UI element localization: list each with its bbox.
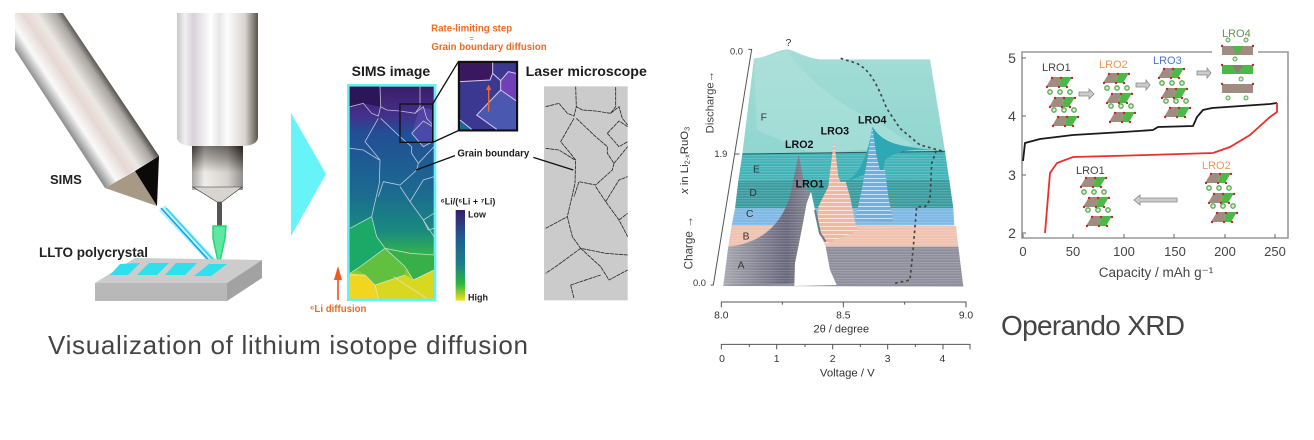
axis ticks and labels: 50 xyxy=(1066,244,1080,259)
axis: voltage xyxy=(719,344,970,380)
peak and region labels: C xyxy=(746,209,754,220)
axis ticks and labels: 200 xyxy=(1214,244,1236,259)
axis ticks and labels: 5 xyxy=(1008,50,1016,66)
axis: composition: x in Li xyxy=(679,164,691,194)
heading: SIMS image: SIMS image xyxy=(352,63,430,79)
structure: LRO3 charge: LRO3 xyxy=(1153,55,1182,67)
arrow: 6Li diffusion xyxy=(310,266,367,315)
legend: colour bar xyxy=(441,196,495,303)
axis: 2-theta: 8.0 xyxy=(714,311,729,322)
label: LLTO polycrystal: LLTO polycrystal xyxy=(39,245,148,260)
structure: LRO1 charge xyxy=(1042,62,1079,127)
axis: composition: 3 xyxy=(683,127,692,131)
legend: colour bar: High xyxy=(468,293,488,303)
axis: composition: 0.0 xyxy=(693,278,706,288)
axis ticks and labels xyxy=(1008,50,1286,280)
laser microscope image xyxy=(544,86,628,300)
axis: voltage: 4 xyxy=(939,354,945,365)
voltage profile dotted curve xyxy=(841,58,943,283)
label: SIMS: SIMS xyxy=(50,172,82,187)
structure: LRO2 discharge xyxy=(1202,160,1238,223)
chart: operando XRD waterfall xyxy=(679,38,973,380)
axis: 2-theta: 2θ / degree xyxy=(814,324,869,336)
peak and region labels: B xyxy=(743,231,750,242)
peak and region labels: LRO1 xyxy=(796,178,824,190)
legend: colour bar: Low xyxy=(468,209,486,219)
legend: colour bar: ⁶Li/(⁶Li + ⁷Li) xyxy=(441,196,495,206)
axis ticks and labels: 3 xyxy=(1008,167,1016,183)
peak and region labels: LRO3 xyxy=(821,125,849,137)
structure: LRO3 charge xyxy=(1153,55,1191,118)
peak and region labels xyxy=(738,38,886,271)
axis: voltage: 0 xyxy=(719,354,725,365)
axis: composition: 0.0 xyxy=(730,46,743,56)
axis ticks and labels: 0 xyxy=(1019,244,1027,259)
peak and region labels: ? xyxy=(786,38,792,49)
axis ticks and labels: 250 xyxy=(1264,244,1286,259)
axis: 2-theta: 8.5 xyxy=(836,311,851,322)
heading: rate-limiting step xyxy=(431,23,547,53)
structure: LRO4: LRO4 xyxy=(1222,28,1251,40)
axis: 2-theta: 9.0 xyxy=(959,311,973,322)
axis: composition: Charge → xyxy=(683,216,696,269)
axis: voltage: 1 xyxy=(774,354,780,365)
peak and region labels: LRO2 xyxy=(785,139,813,151)
structure: LRO1 charge: LRO1 xyxy=(1042,62,1071,74)
peak and region labels: A xyxy=(738,260,745,271)
axis ticks and labels: 4 xyxy=(1008,108,1016,124)
peak and region labels: LRO4 xyxy=(858,114,886,126)
icon: angled SIMS ion gun xyxy=(15,13,159,206)
structure: LRO4 xyxy=(1221,28,1254,100)
waterfall bands xyxy=(723,49,963,287)
structure: LRO1 discharge xyxy=(1076,165,1113,227)
axis: composition: 1.9 xyxy=(714,149,727,159)
caption: Operando XRD: Operando XRD xyxy=(1001,310,1185,341)
heading: rate-limiting step: = xyxy=(470,37,474,43)
caption: visualization: Visualization of lithium isotope diffusion xyxy=(48,330,528,360)
peak: LRO3 xyxy=(817,140,858,243)
discharge curve xyxy=(1045,103,1277,233)
axis ticks and labels: Capacity / mAh g⁻¹ xyxy=(1099,265,1214,280)
axis: 2-theta xyxy=(714,302,973,336)
charge curve xyxy=(1023,103,1277,161)
callout: grain boundary: Grain boundary xyxy=(457,148,530,159)
axis: voltage: 2 xyxy=(830,354,836,365)
axis: voltage: 3 xyxy=(885,354,891,365)
axis: composition: 2-x xyxy=(683,154,692,164)
arrow: cyan triangle xyxy=(291,113,326,236)
structure: LRO1 discharge: LRO1 xyxy=(1076,165,1105,177)
peak: LRO1 xyxy=(794,192,837,286)
axis ticks and labels: 2 xyxy=(1008,225,1016,241)
structure: LRO2 charge: LRO2 xyxy=(1099,59,1128,71)
arrows between structures xyxy=(1079,68,1211,205)
icon: LLTO sample slab xyxy=(95,258,262,301)
peak: LRO2 xyxy=(723,155,813,286)
axis ticks and labels: 100 xyxy=(1113,244,1135,259)
peak and region labels: D xyxy=(749,188,757,199)
axis: composition xyxy=(679,46,752,288)
SIMS map with grain boundaries xyxy=(348,85,435,300)
chart: capacity voltage curves xyxy=(1008,28,1288,280)
structure: LRO2 discharge: LRO2 xyxy=(1202,160,1231,172)
panel: SIMS and laser microscope images xyxy=(310,23,647,315)
heading: rate-limiting step: Rate-limiting step xyxy=(431,23,512,34)
icon: vertical probe column xyxy=(177,13,258,228)
magnified inset xyxy=(433,62,517,142)
axis: voltage: Voltage / V xyxy=(820,368,875,380)
peak: LRO4 xyxy=(843,127,943,222)
icon: green plume xyxy=(213,226,226,266)
callout: grain boundary xyxy=(416,148,573,170)
axis: composition: Discharge→ xyxy=(704,71,716,133)
panel: SIMS apparatus illustration xyxy=(15,13,262,301)
heading: Laser microscope: Laser microscope xyxy=(526,64,647,80)
heading: rate-limiting step: Grain boundary diffusion xyxy=(431,42,547,53)
peak and region labels: F xyxy=(761,113,767,124)
axis ticks and labels: 150 xyxy=(1164,244,1186,259)
axis: composition: RuO xyxy=(679,131,691,154)
arrow: 6Li diffusion: ⁶Li diffusion xyxy=(310,304,367,315)
structure: LRO2 charge xyxy=(1099,59,1136,123)
peak and region labels: E xyxy=(753,165,760,176)
icon: cyan ion beam xyxy=(161,208,217,265)
plot frame xyxy=(1022,52,1288,238)
